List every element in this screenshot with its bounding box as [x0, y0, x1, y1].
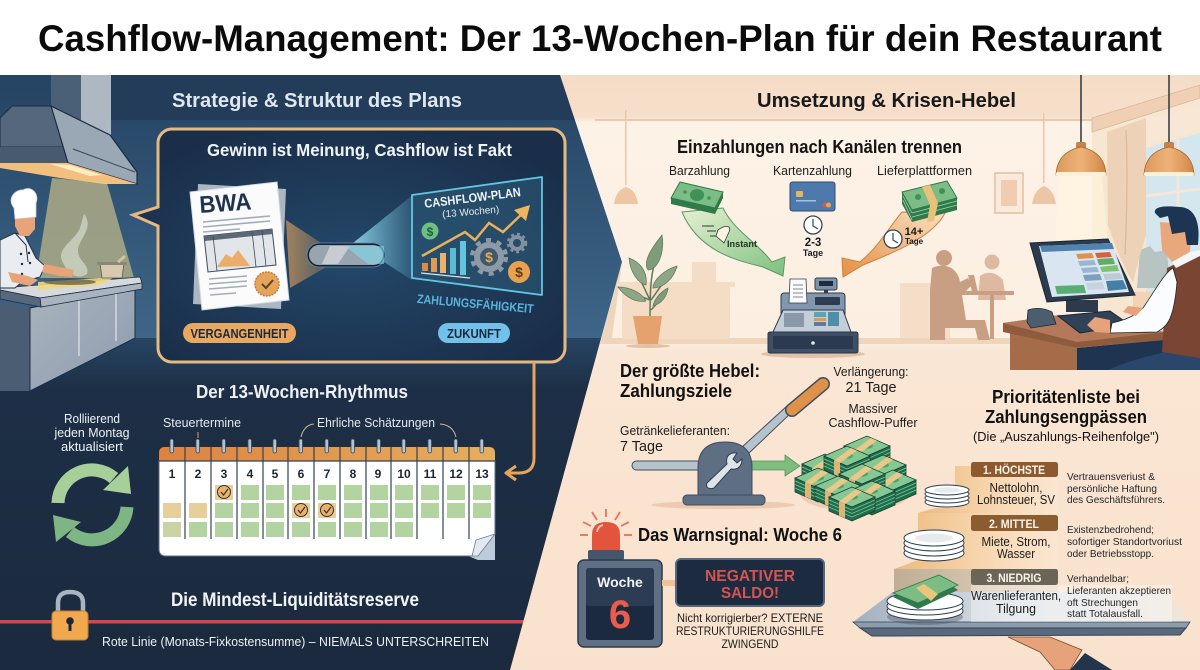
panel: week 6 display: 6	[609, 593, 631, 637]
heading: separate deposits: Einzahlungen nach Kanälen trennen	[677, 136, 962, 157]
tier 1: highest priority: 1. HÖCHSTE	[983, 462, 1045, 477]
tray	[853, 585, 1190, 636]
calendar column dividers	[159, 447, 495, 539]
panel: implementation background	[510, 75, 1200, 670]
calendar tax date cells	[163, 485, 336, 518]
tier 3: low priority: 3. NIEDRIG	[986, 571, 1042, 585]
icon: cash bundle	[671, 182, 723, 214]
heading: warning signal: Das Warnsignal: Woche 6	[638, 524, 842, 545]
arrow: cash flow instant	[682, 208, 785, 276]
pill: past	[183, 323, 296, 343]
calendar week numbers: 12	[449, 467, 463, 481]
label: delivery platforms: Lieferplattformen	[877, 164, 972, 178]
icon: cash register	[761, 278, 865, 358]
label: beverage suppliers 7 days: Getränkelieferanten:	[620, 424, 730, 438]
tier 2: medium priority	[971, 515, 1058, 561]
label: 2-3 days: 2-3	[805, 237, 821, 249]
tier 2 explanation: sofortiger Standortvoriust	[1067, 536, 1182, 548]
title band	[0, 0, 1200, 75]
picture frame	[995, 173, 1023, 213]
card reader	[1027, 308, 1056, 328]
pill: future	[438, 323, 510, 343]
label: 2-3 days: Tage	[803, 248, 823, 258]
steam	[61, 214, 88, 277]
arrow: delivery platform flow: Tage	[905, 237, 924, 246]
icon: gears and coins	[422, 222, 530, 283]
tier 1: highest priority: Nettolohn,	[990, 481, 1042, 495]
calendar rings	[170, 439, 484, 453]
kitchen hood	[0, 75, 137, 184]
text: red line rule: Rote Linie (Monats-Fixkostensumme) – NIEMALS UNTERSCHREITEN	[102, 634, 489, 649]
icon: BWA document: BWA	[199, 188, 252, 219]
heading: biggest lever: Der größte Hebel:	[620, 360, 760, 381]
arrow: plan to calendar	[506, 362, 534, 480]
icon: lever	[632, 384, 823, 509]
illustration: restaurant background	[595, 75, 1200, 370]
heading: 13-week rhythm: Der 13-Wochen-Rhythmus	[196, 381, 408, 402]
calendar week numbers: 1	[169, 467, 176, 481]
label: cashflow buffer: Cashflow-Puffer	[828, 416, 918, 430]
faded ceiling lamp	[614, 110, 638, 204]
POS monitor	[1030, 239, 1135, 312]
label: solvency: ZAHLUNGSFÄHIGKEIT	[416, 291, 535, 316]
calendar week numbers: 3	[221, 467, 228, 481]
panel: cashflow plan screen	[412, 177, 542, 295]
calendar week numbers: 5	[272, 467, 279, 481]
heading: priority list: Prioritätenliste bei	[992, 386, 1140, 407]
calendar week numbers: 2	[195, 467, 202, 481]
counter	[0, 277, 142, 391]
heading: biggest lever: Zahlungsziele	[620, 380, 732, 401]
plate stack top	[925, 485, 969, 507]
window and curtain	[1092, 85, 1200, 340]
icon: padlock	[52, 592, 88, 640]
tier 1 explanation: persönliche Haftung	[1067, 483, 1157, 495]
man	[1087, 206, 1200, 370]
callout: negative balance: NEGATIVER	[705, 568, 795, 585]
tier 2: medium priority: Miete, Strom,	[982, 535, 1050, 549]
icon: gears and coins: $	[485, 249, 493, 265]
panel: week 6 display: Woche	[597, 574, 643, 590]
labels: calendar annotations: Ehrliche Schätzungen	[317, 416, 435, 430]
panel: BWA vs cashflow plan	[133, 129, 565, 362]
pill: past: VERGANGENHEIT	[190, 327, 289, 341]
pendant lamps	[1052, 75, 1194, 290]
plant	[618, 235, 677, 348]
man at POS terminal	[1003, 206, 1200, 370]
tier 3 explanation: oft Strechungen	[1067, 597, 1138, 609]
keyboard	[1058, 311, 1130, 333]
calendar week numbers: 10	[397, 467, 411, 481]
label: extension 21 days	[834, 365, 908, 396]
pot	[97, 256, 127, 278]
heading: minimum liquidity reserve: Die Mindest-Liquiditätsreserve	[171, 590, 419, 611]
calendar week numbers: 9	[375, 467, 382, 481]
label: cashflow buffer	[828, 402, 918, 430]
label: cashflow buffer: Massiver	[848, 402, 898, 416]
panel: cashflow plan screen: CASHFLOW-PLAN	[424, 185, 522, 211]
arrow: cash flow instant: Instant	[727, 239, 758, 250]
icon: banded cash stack	[902, 181, 957, 222]
calendar check marks	[218, 486, 334, 516]
calendar week numbers: 4	[247, 467, 254, 481]
callout: negative balance: SALDO!	[721, 585, 779, 602]
icon: refresh arrows	[53, 466, 131, 542]
hand holding tray	[1008, 637, 1112, 670]
tier 2: medium priority: Wasser	[997, 547, 1035, 561]
label: beverage suppliers 7 days	[620, 424, 730, 455]
graphic: priority staircase on tray	[853, 466, 1190, 670]
icon: rear-view mirror	[307, 194, 414, 280]
label: extension 21 days: 21 Tage	[846, 380, 896, 396]
label: extension 21 days: Verlängerung:	[834, 365, 908, 379]
text: external help required: ZWINGEND	[722, 637, 779, 651]
label: beverage suppliers 7 days: 7 Tage	[620, 439, 663, 455]
icon: gears and coins: $	[515, 264, 523, 280]
labels: calendar annotations	[163, 416, 456, 438]
icon: clock 2-3 days	[804, 216, 822, 234]
heading: profit vs cashflow: Gewinn ist Meinung, Cashflow ist Fakt	[207, 140, 512, 160]
title band: Cashflow-Management: Der 13-Wochen-Plan für dein Restaurant	[38, 18, 1162, 59]
faded pendant	[1032, 113, 1056, 204]
chart: 13-week calendar	[159, 439, 495, 560]
tier 2 explanation: oder Betriebsstopp.	[1067, 548, 1154, 560]
panel: week 6 display	[578, 560, 662, 647]
tier 3: low priority: Warenlieferanten,	[971, 589, 1061, 603]
chart: growth bars and arrow	[421, 205, 530, 278]
plate stack with cash	[887, 575, 963, 625]
label: cash: Barzahlung	[669, 164, 730, 178]
tier 1: highest priority	[971, 462, 1058, 507]
tier 3: low priority	[971, 569, 1061, 616]
panel: strategy background	[0, 75, 640, 670]
heading: priority list: (Die „Auszahlungs-Reihenfolge")	[973, 430, 1159, 444]
text: rolling update: Rolliierend	[64, 412, 120, 426]
tier 3: low priority: Tilgung	[996, 602, 1036, 616]
diners silhouettes	[900, 250, 1014, 340]
callout: negative balance	[662, 559, 824, 606]
text: external help required: RESTRUKTURIERUNGSHILFE	[676, 624, 824, 638]
icon: BWA document	[190, 182, 335, 310]
tier 3 explanation: Verhandelbar;	[1067, 573, 1129, 585]
tier 3 explanation: statt Totalausfall.	[1067, 608, 1143, 620]
red line	[0, 620, 528, 624]
icon: gears and coins: $	[427, 225, 434, 239]
labels: calendar annotations: Steuertermine	[163, 416, 241, 430]
icon: credit card	[790, 182, 835, 211]
tier 2: medium priority: 2. MITTEL	[989, 517, 1039, 531]
tier 1 explanation: Vertrauensveriust &	[1067, 471, 1155, 483]
desk	[1003, 315, 1200, 370]
callout box	[133, 129, 565, 362]
label: card: Kartenzahlung	[773, 164, 852, 178]
icon: red siren	[580, 509, 632, 560]
calendar week numbers: 6	[298, 467, 305, 481]
calendar week numbers	[169, 467, 489, 481]
text: rolling update: aktualisiert	[61, 440, 124, 454]
icon: stacks of money	[795, 436, 916, 521]
heading: priority list	[973, 386, 1159, 444]
calendar green estimate cells	[163, 485, 491, 537]
text: rolling update	[54, 412, 130, 454]
illustration: kitchen with chef	[0, 75, 640, 391]
heading: priority list: Zahlungsengpässen	[985, 406, 1147, 427]
heading: biggest lever	[620, 360, 760, 401]
text: external help required	[676, 611, 824, 651]
arrow: delivery platform flow	[842, 212, 945, 277]
text: external help required: Nicht korrigierber? EXTERNE	[677, 611, 823, 625]
tier 2 explanation: Existenzbedrohend;	[1067, 524, 1154, 536]
calendar week numbers: 13	[475, 467, 489, 481]
tier 2 explanation	[1067, 524, 1182, 560]
faded counter	[617, 262, 735, 339]
tier 1 explanation: des Geschäftsführers.	[1067, 494, 1165, 506]
label: 2-3 days	[803, 237, 823, 258]
pill: future: ZUKUNFT	[447, 327, 501, 341]
chef	[0, 188, 74, 288]
calendar week numbers: 11	[424, 467, 437, 481]
calendar week numbers: 8	[350, 467, 357, 481]
heading: implementation: Umsetzung & Krisen-Hebel	[757, 90, 1016, 112]
tier 1 explanation	[1067, 471, 1165, 506]
heading: strategy: Strategie & Struktur des Plans	[172, 90, 462, 112]
calendar week numbers: 7	[324, 467, 331, 481]
arrow: delivery platform flow: 14+	[905, 226, 923, 238]
text: rolling update: jeden Montag	[54, 426, 130, 440]
tier 3 explanation: Lieferanten akzeptieren	[1067, 585, 1171, 597]
tier 3 explanation	[1067, 573, 1171, 620]
panel: cashflow plan screen: (13 Wochen)	[442, 205, 500, 220]
tier 1: highest priority: Lohnsteuer, SV	[977, 493, 1056, 507]
plate stack middle	[904, 530, 964, 561]
